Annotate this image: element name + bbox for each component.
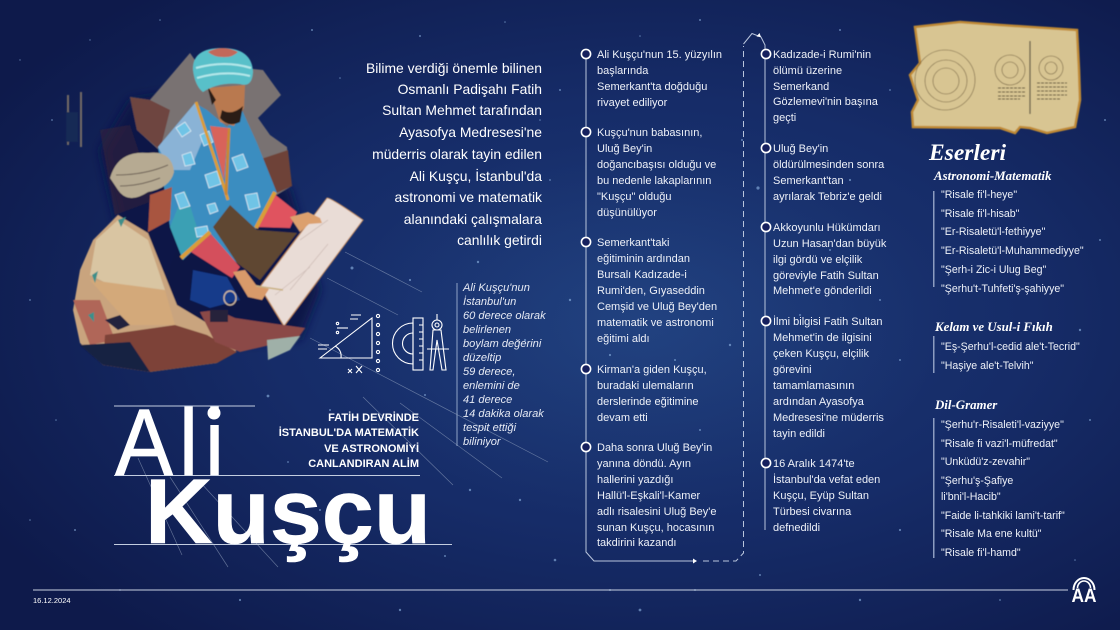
timeline column 2: ölümü üzerine xyxy=(773,65,842,77)
timeline column 1: yanına döndü. Ayın xyxy=(597,458,691,470)
timeline column 2: defnedildi xyxy=(773,522,820,534)
works: dil-gramer: "Faide li-tahkiki lami't-tarif" xyxy=(941,510,1065,522)
timeline column 1: hallerini yazdığı xyxy=(597,474,673,486)
timeline column 2: Gözlemevi'nin başına xyxy=(773,96,879,108)
timeline column 2: ilgi gördü ve elçilik xyxy=(773,254,863,266)
timeline column 1: adlı risalesini Uluğ Bey'e xyxy=(597,506,716,518)
timeline column 1: başlarında xyxy=(597,65,649,77)
inner shirt xyxy=(210,126,228,180)
subtitle: İSTANBUL'DA MATEMATİK xyxy=(279,426,419,439)
painted backdrop xyxy=(130,53,290,197)
title: Ali Kuşçu: Kuşçu xyxy=(145,461,431,563)
works: astronomi-matematik xyxy=(933,169,1084,295)
teacher face xyxy=(207,85,245,126)
title: Ali Kuşçu: A xyxy=(115,390,174,496)
timeline column 1: Hallü'l-Eşkali'l-Kamer xyxy=(597,490,701,502)
logo: AA: AA xyxy=(1072,586,1097,607)
subtitle xyxy=(279,411,419,470)
works heading: Eserleri xyxy=(928,140,1006,166)
timeline column 2: Türbesi civarına xyxy=(773,506,852,518)
timeline column 1: Daha sonra Uluğ Bey'in xyxy=(597,442,712,454)
works: dil-gramer: "Risale fi'l-hamd" xyxy=(941,547,1021,559)
subtitle: VE ASTRONOMİYİ xyxy=(324,442,419,455)
side note: 59 derece, xyxy=(463,366,515,378)
side note: boylam değerini xyxy=(463,338,542,350)
works: astronomi-matematik: "Şerh-i Zic-i Ulug Beg" xyxy=(941,264,1046,276)
timeline column 2: ardından Ayasofya xyxy=(773,396,865,408)
title: Ali Kuşçu xyxy=(114,390,452,563)
hands xyxy=(290,212,322,232)
title: Ali Kuşçu: l xyxy=(178,390,199,496)
works: dil-gramer: "Şerhu'ş-Şafiye xyxy=(941,475,1013,487)
date: 16.12.2024 xyxy=(33,596,71,605)
side note: tespit ettiği xyxy=(463,422,517,434)
dark backdrop xyxy=(100,90,320,345)
timeline column 2: Kadızade-i Rumi'nin xyxy=(773,49,871,61)
timeline column 2: Semerkant'tan xyxy=(773,175,844,187)
timeline column 1: eğitiminin ardından xyxy=(597,253,690,265)
parchment manuscript xyxy=(910,22,1080,133)
timeline column 2: Uzun Hasan'dan büyük xyxy=(773,238,887,250)
intro paragraph: Bilime verdiği önemle bilinen xyxy=(366,60,542,76)
timeline column 2: tamamlamasının xyxy=(773,380,854,392)
timeline column 1: devam etti xyxy=(597,412,648,424)
works: astronomi-matematik: "Şerhu't-Tuhfeti'ş-şahiyye" xyxy=(941,283,1064,295)
timeline column 2: tayin edildi xyxy=(773,428,825,440)
logo: AA xyxy=(1072,578,1097,607)
intro paragraph: Ali Kuşçu, İstanbul'da xyxy=(410,167,542,184)
timeline column 2: öldürülmesinden sonra xyxy=(773,159,885,171)
side note: enlemini de xyxy=(463,380,520,392)
timeline column 1: bu nedenle lakaplarının xyxy=(597,175,711,187)
works: astronomi-matematik: "Er-Risaletü'l-fethiyye" xyxy=(941,226,1046,238)
works: kelam ve usul-i fıkıh xyxy=(933,320,1080,373)
works: dil-gramer xyxy=(933,398,1065,559)
works: dil-gramer: Dil-Gramer xyxy=(934,398,998,412)
timeline column 1: matematik ve astronomi xyxy=(597,317,714,329)
timeline column 1: sunan Kuşçu, hocasının xyxy=(597,522,714,534)
works: kelam ve usul-i fıkıh: "Haşiye ale't-Telvih" xyxy=(941,360,1034,372)
intro paragraph: Ayasofya Medresesi'ne xyxy=(399,124,542,140)
timeline column 1: Kuşçu'nun babasının, xyxy=(597,127,702,139)
student robe xyxy=(73,215,237,372)
timeline column 1: Cemşid ve Uluğ Bey'den xyxy=(597,301,717,313)
side note: düzeltip xyxy=(463,352,501,364)
works: dil-gramer: li'bni'l-Hacib" xyxy=(941,491,1001,503)
timeline column 1: rivayet ediliyor xyxy=(597,97,668,109)
timeline column 2: göreviyle Fatih Sultan xyxy=(773,270,879,282)
works: astronomi-matematik: Astronomi-Matematik xyxy=(933,169,1052,183)
intro paragraph: Osmanlı Padişahı Fatih xyxy=(398,81,542,97)
teacher turban xyxy=(193,48,253,92)
intro paragraph: müderris olarak tayin edilen xyxy=(372,146,542,162)
timeline column 2: Uluğ Bey'in xyxy=(773,143,828,155)
timeline column 2: ayrılarak Tebriz'e geldi xyxy=(773,191,882,203)
illustration: Ali Kuşçu and student xyxy=(66,48,363,372)
timeline column 2 xyxy=(773,49,887,534)
diagonal construction lines xyxy=(138,252,548,567)
timeline connector xyxy=(586,33,765,564)
timeline column 2: Semerkand xyxy=(773,81,829,93)
timeline column 2: 16 Aralık 1474'te xyxy=(773,458,855,470)
timeline column 2: görevini xyxy=(773,364,812,376)
robe trim xyxy=(196,102,228,200)
timeline column 1: buradaki ulemaların xyxy=(597,380,694,392)
intro paragraph: canlılık getirdi xyxy=(457,232,542,248)
works: astronomi-matematik: "Risale fi'l-heye" xyxy=(941,189,1017,201)
icons: triangle, protractor and compass xyxy=(318,314,449,373)
left sleeve xyxy=(188,233,240,278)
works: dil-gramer: "Risale fi vazi'l-müfredat" xyxy=(941,438,1058,450)
timeline column 1: Semerkant'ta doğduğu xyxy=(597,81,707,93)
works: astronomi-matematik: "Risale fi'l-hisab" xyxy=(941,208,1020,220)
blue robe xyxy=(158,103,277,263)
timeline column 1: Ali Kuşçu'nun 15. yüzyılın xyxy=(597,49,722,61)
timeline bullets xyxy=(581,49,771,468)
side note: belirlenen xyxy=(463,324,511,336)
intro paragraph: Sultan Mehmet tarafından xyxy=(382,102,542,118)
side note: biliniyor xyxy=(463,436,502,448)
timeline column 1: doğancıbaşısı olduğu ve xyxy=(597,159,716,171)
timeline column 2: Medresesi'ne müderris xyxy=(773,412,884,424)
subtitle: CANLANDIRAN ALİM xyxy=(308,457,419,470)
right sleeve xyxy=(257,193,297,228)
works: astronomi-matematik: "Er-Risaletü'l-Muhammediyye" xyxy=(941,245,1084,257)
timeline column 1: "Kuşçu" olduğu xyxy=(597,191,671,203)
intro paragraph: astronomi ve matematik xyxy=(395,189,542,205)
side note: İstanbul'un xyxy=(463,296,516,308)
timeline column 1: Bursalı Kadızade-i xyxy=(597,269,687,281)
subtitle: FATİH DEVRİNDE xyxy=(328,411,419,424)
icon: right triangle xyxy=(318,314,380,373)
works: kelam ve usul-i fıkıh: "Eş-Şerhu'l-cedid ale't-Tecrid" xyxy=(941,341,1080,353)
blue ink patch xyxy=(190,270,240,308)
side note: 60 derece olarak xyxy=(463,310,547,322)
icon: protractor and ruler xyxy=(392,318,423,370)
timeline column 1: takdirini kazandı xyxy=(597,537,676,549)
timeline column 1: Rumi'den, Gıyaseddin xyxy=(597,285,705,297)
works: kelam ve usul-i fıkıh: Kelam ve Usul-i Fıkıh xyxy=(934,320,1053,334)
timeline column 2: Mehmet'e gönderildi xyxy=(773,285,872,297)
student turban xyxy=(110,153,174,198)
board xyxy=(260,198,363,326)
timeline column 2: Mehmet'in de ilgisini xyxy=(773,332,872,344)
timeline column 2: İstanbul'da vefat eden xyxy=(773,473,880,486)
icon: compass xyxy=(427,314,449,370)
works: dil-gramer: "Unküdü'z-zevahir" xyxy=(941,456,1030,468)
brown apron xyxy=(213,205,297,280)
timeline column 1: derslerinde eğitimine xyxy=(597,396,698,408)
timeline column 2: çeken Kuşçu, elçilik xyxy=(773,348,869,360)
timeline column 1: Uluğ Bey'in xyxy=(597,143,652,155)
desk and tools xyxy=(200,310,305,352)
student head and neck xyxy=(148,187,172,232)
intro paragraph: alanındaki çalışmalara xyxy=(404,211,542,227)
intro paragraph xyxy=(366,60,542,248)
side note: 14 dakika olarak xyxy=(463,408,545,420)
works: dil-gramer: "Şerhu'r-Risaleti'l-vaziyye" xyxy=(941,419,1064,431)
side note: 41 derece xyxy=(463,394,512,406)
timeline column 1: eğitimi aldı xyxy=(597,333,650,345)
timeline column 2: Kuşçu, Eyüp Sultan xyxy=(773,490,869,502)
timeline column 2: İlmi bilgisi Fatih Sultan xyxy=(773,315,882,328)
timeline column 1: Kirman'a giden Kuşçu, xyxy=(597,364,707,376)
footer rule xyxy=(33,590,1068,591)
timeline column 2: Akkoyunlu Hükümdarı xyxy=(773,222,881,234)
side note: Ali Kuşçu'nun xyxy=(462,282,530,294)
side note xyxy=(456,282,547,448)
timeline column 1: düşünülüyor xyxy=(597,207,657,219)
timeline column 2: geçti xyxy=(773,112,796,124)
title: Ali Kuşçu: i xyxy=(204,390,225,496)
timeline column 1: Semerkant'taki xyxy=(597,237,669,249)
works: dil-gramer: "Risale Ma ene kultü" xyxy=(941,528,1042,540)
timeline column 1 xyxy=(597,49,722,549)
